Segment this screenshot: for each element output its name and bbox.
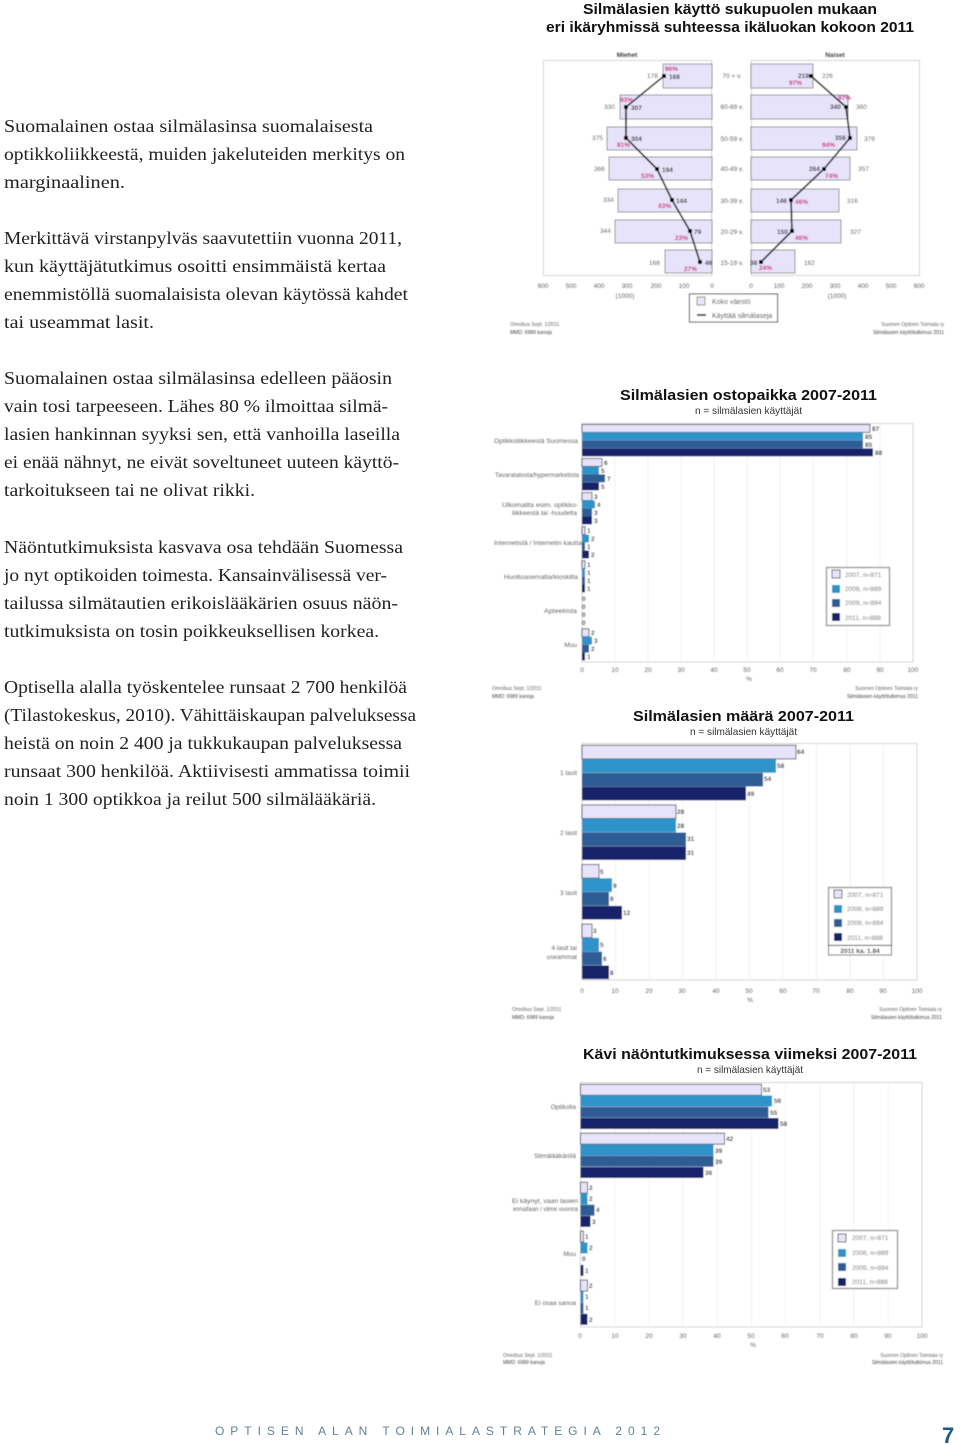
axis labels: 400: [594, 283, 605, 290]
heading: place of purchase chart: [620, 387, 877, 417]
category labels: Tavaratalosta/hypermarketista: [495, 472, 579, 479]
bar values: 39: [715, 1159, 723, 1166]
percent labels: 97%: [789, 80, 802, 87]
x axis: 0: [578, 1333, 582, 1340]
x axis: %: [747, 997, 753, 1004]
source notes: Omnibus Sept. 1/2011: [503, 1353, 553, 1359]
heading: number of glasses chart: Silmälasien määrä 2007-2011: [633, 708, 854, 725]
value labels: 366: [594, 166, 605, 173]
bar values: 1: [587, 654, 591, 661]
axis labels: 100: [774, 283, 785, 290]
source notes: MMD: 6989 kanoja: [492, 694, 534, 700]
x axis: 90: [879, 988, 887, 995]
heading: last eye exam chart: [583, 1046, 917, 1076]
percent labels: 93%: [620, 97, 633, 104]
axis labels: 600: [914, 283, 925, 290]
legend: [828, 888, 892, 955]
source notes: Omnibus Sept. 1/2011: [512, 1007, 562, 1013]
axis labels: 300: [830, 283, 841, 290]
bar values: 8: [610, 896, 614, 903]
category labels: Internetistä / Internetin kautta: [494, 540, 582, 547]
bar values: 7: [607, 476, 611, 483]
legend: [690, 294, 778, 322]
bar values: 1: [585, 1305, 589, 1312]
bar values: 58: [780, 1121, 788, 1128]
x axis: 40: [712, 988, 720, 995]
axis labels: 200: [802, 283, 813, 290]
percent labels: 74%: [825, 173, 838, 180]
source notes: Omnibus Sept. 1/2011: [510, 322, 560, 328]
bars: [580, 1084, 778, 1325]
category labels: Ulkomailta esim. optikko-: [502, 502, 578, 509]
bars: [582, 424, 873, 660]
age labels: [720, 73, 744, 267]
x axis: 100: [912, 988, 923, 995]
value labels: 344: [600, 228, 611, 235]
source notes: [512, 1007, 942, 1021]
x axis: 0: [580, 988, 584, 995]
category labels: [494, 438, 582, 649]
heading: place of purchase chart: n = silmälasien käyttäjät: [695, 405, 802, 417]
text block: body copy: runsaat 300 henkilöä. Aktiivisesti ammatissa toimii: [4, 761, 410, 781]
legend: 2011 ka. 1.84: [840, 948, 880, 955]
age labels: 30-39 v.: [720, 198, 744, 205]
bar values: 5: [600, 942, 604, 949]
bar values: 5: [601, 484, 605, 491]
x axis: 50: [747, 1333, 755, 1340]
category labels: 3 lasit: [560, 890, 577, 897]
bar values: 2: [589, 1185, 593, 1192]
percent labels: 23%: [675, 235, 688, 242]
bar values: 3: [594, 494, 598, 501]
bar values: 3: [594, 510, 598, 517]
value labels: 327: [850, 229, 861, 236]
legend: 2009, n=894: [847, 920, 884, 927]
legend: Käyttää silmälaseja: [712, 313, 772, 320]
percent labels: 46%: [795, 235, 808, 242]
line: women wearing glasses: [759, 74, 852, 264]
axis labels: (1000): [616, 293, 634, 300]
bar values: 56: [774, 1098, 782, 1105]
value labels: 375: [592, 135, 603, 142]
age labels: 50-59 v.: [720, 136, 744, 143]
category labels: Ei käynyt, vaan lasien: [512, 1198, 578, 1205]
bar values: 31: [687, 836, 695, 843]
bars: men: [607, 64, 712, 273]
value labels: 316: [847, 198, 858, 205]
bar values: 85: [865, 434, 873, 441]
percent labels: 96%: [665, 66, 678, 73]
text block: body copy: Optisella alalla työskentelee runsaat 2 700 henkilöä: [4, 677, 407, 697]
category labels: Apteekista: [544, 608, 577, 615]
bar values: 0: [582, 604, 586, 611]
line: men wearing glasses: [624, 74, 702, 264]
legend: 2007, n=871: [852, 1235, 889, 1242]
text block: body copy: Merkittävä virstanpylväs saavutettiin vuonna 2011,: [4, 228, 402, 248]
bar values: 2: [589, 1245, 593, 1252]
axis labels: 500: [886, 283, 897, 290]
chart: population pyramid of glasses use: [510, 52, 944, 336]
value labels: 334: [603, 197, 614, 204]
value labels: 357: [858, 166, 869, 173]
x axis: 30: [678, 988, 686, 995]
value labels: 146: [776, 198, 787, 205]
value labels: 46: [705, 260, 713, 267]
category labels: Optikolla: [551, 1104, 576, 1111]
axis labels: 400: [858, 283, 869, 290]
source notes: Suomen Optinen Toimiala ry: [879, 1007, 942, 1013]
axis labels: 500: [566, 283, 577, 290]
text block: body copy: tai useammat lasit.: [4, 312, 154, 332]
x axis: 60: [779, 988, 787, 995]
x axis: 70: [816, 1333, 824, 1340]
category labels: Optikkoliikkeestä Suomessa: [494, 438, 578, 445]
x axis: 10: [611, 988, 619, 995]
bar values: 2: [591, 630, 595, 637]
age labels: 40-49 v.: [720, 166, 744, 173]
value labels: [592, 73, 875, 267]
x axis: %: [750, 1342, 756, 1349]
category labels: Silmälääkärillä: [534, 1153, 576, 1160]
value labels: 304: [631, 136, 642, 143]
category labels: ennallaan / viime vuonna: [513, 1206, 578, 1213]
x axis: 80: [846, 988, 854, 995]
bar values: 3: [592, 1219, 596, 1226]
bar values: 2: [591, 536, 595, 543]
text block: body copy: tailussa silmätautien erikoislääkärien osuus näön-: [4, 593, 398, 613]
heading: age group chart: eri ikäryhmissä suhteessa ikäluokan kokoon 2011: [546, 19, 914, 36]
bar values: 4: [597, 502, 601, 509]
value labels: 356: [835, 135, 846, 142]
chart: population pyramid of glasses use: Miehet: [617, 52, 638, 59]
axis labels: (1000): [828, 293, 846, 300]
value labels: 360: [856, 104, 867, 111]
x axis: 40: [710, 667, 718, 674]
value labels: 38: [750, 260, 758, 267]
percent labels: 53%: [641, 173, 654, 180]
axis labels: 200: [651, 283, 662, 290]
bar values: 3: [594, 638, 598, 645]
text block: body copy: kun käyttäjätutkimus osoitti ensimmäistä kertaa: [4, 256, 386, 276]
source notes: Suomen Optinen Toimiala ry: [855, 686, 918, 692]
text block: body copy: ei enää nähnyt, ne eivät soveltuneet uuteen käyttö-: [4, 452, 399, 472]
source notes: Silmälasien käyttötutkimus 2011: [873, 330, 944, 336]
category labels: useammat: [547, 954, 577, 961]
value labels: 219: [798, 73, 809, 80]
category labels: 4 lasit tai: [551, 945, 577, 952]
x axis: 60: [781, 1333, 789, 1340]
bar values: 58: [777, 763, 785, 770]
bar values: 0: [582, 620, 586, 627]
bar values: 1: [587, 578, 591, 585]
bar values: 3: [594, 518, 598, 525]
source notes: MMD: 6989 kanoja: [510, 330, 552, 336]
value labels: 264: [809, 166, 820, 173]
category labels: [547, 770, 577, 961]
x axis: 10: [611, 1333, 619, 1340]
legend: [832, 1230, 898, 1288]
text block: body copy: Suomalainen ostaa silmälasinsa suomalaisesta: [4, 116, 373, 136]
bar values: 1: [585, 1234, 589, 1241]
x axis: 30: [677, 667, 685, 674]
percent labels: 97%: [838, 95, 851, 102]
value labels: 144: [676, 198, 687, 205]
heading: last eye exam chart: n = silmälasien käyttäjät: [697, 1064, 803, 1076]
percent labels: 43%: [658, 203, 671, 210]
axis labels: [538, 283, 925, 300]
source notes: Silmälasien käyttötutkimus 2011: [847, 694, 918, 700]
bar values: 1: [587, 570, 591, 577]
heading: number of glasses chart: n = silmälasien käyttäjät: [690, 726, 797, 738]
source notes: Suomen Optinen Toimiala ry: [880, 1353, 943, 1359]
axis labels: 0: [710, 283, 714, 290]
bar values: 2: [591, 552, 595, 559]
x axis: 90: [884, 1333, 892, 1340]
x axis: 80: [850, 1333, 858, 1340]
category labels: Ei osaa sanoa: [535, 1300, 576, 1307]
legend: 2009, n=894: [852, 1265, 889, 1272]
bar values: 0: [582, 596, 586, 603]
legend: 2009, n=894: [845, 600, 882, 607]
x axis: 20: [645, 1333, 653, 1340]
bar values: 1: [585, 1268, 589, 1275]
bar values: 53: [763, 1087, 771, 1094]
legend: 2007, n=871: [845, 572, 882, 579]
bar values: 88: [875, 450, 883, 457]
heading: place of purchase chart: Silmälasien ostopaikka 2007-2011: [620, 387, 877, 404]
x axis: 90: [876, 667, 884, 674]
chart: place of purchase: [492, 424, 919, 700]
text block: body copy: vain tosi tarpeeseen. Lähes 80 % ilmoittaa silmä-: [4, 396, 388, 416]
value labels: 168: [649, 260, 660, 267]
value labels: 340: [830, 104, 841, 111]
bar values: 0: [582, 1256, 586, 1263]
bar values: 9: [613, 883, 617, 890]
age labels: 20-29 v.: [720, 229, 744, 236]
text block: body copy: optikkoliikkeestä, muiden jakeluteiden merkitys on: [4, 144, 405, 164]
source notes: MMD: 6989 kanoja: [512, 1015, 554, 1021]
x axis: 20: [645, 988, 653, 995]
x axis: 20: [644, 667, 652, 674]
age labels: 70 + v.: [722, 73, 742, 80]
x axis: [580, 667, 919, 683]
legend: 2011, n=888: [852, 1279, 888, 1286]
legend: 2007, n=871: [847, 892, 884, 899]
bar values: 54: [764, 776, 772, 783]
x axis: 0: [580, 667, 584, 674]
category labels: liikkeestä tai -huudelta: [512, 510, 577, 517]
text block: body copy: enemmistöllä suomalaisista olevan käytössä kahdet: [4, 284, 408, 304]
axis labels: 300: [622, 283, 633, 290]
source notes: Omnibus Sept. 1/2011: [492, 686, 542, 692]
chart: population pyramid of glasses use: Naiset: [825, 52, 846, 59]
bar values: 6: [604, 460, 608, 467]
x axis: 100: [908, 667, 919, 674]
value labels: 379: [864, 136, 875, 143]
bar values: 2: [589, 1283, 593, 1290]
text block: body copy: Suomalainen ostaa silmälasinsa edelleen pääosin: [4, 368, 392, 388]
legend: [826, 568, 890, 626]
legend: 2008, n=889: [845, 586, 882, 593]
source notes: Silmälasien käyttötutkimus 2011: [871, 1015, 942, 1021]
bar values: [582, 426, 883, 661]
heading: number of glasses chart: [633, 708, 854, 738]
heading: last eye exam chart: Kävi näöntutkimuksessa viimeksi 2007-2011: [583, 1046, 917, 1063]
legend: Koko väestö: [712, 299, 751, 306]
bar values: 31: [687, 850, 695, 857]
source notes: Suomen Optinen Toimiala ry: [881, 322, 944, 328]
bar values: 85: [865, 442, 873, 449]
heading: age group chart: Silmälasien käyttö sukupuolen mukaan: [583, 1, 877, 18]
value labels: 150: [777, 229, 788, 236]
text block: body copy: lasien hankinnan syyksi sen, että vanhoilla laseilla: [4, 424, 400, 444]
text block: body copy: noin 1 300 optikkoa ja reilut 500 silmälääkäriä.: [4, 789, 376, 809]
axis labels: 600: [538, 283, 549, 290]
age labels: 60-69 v.: [720, 104, 744, 111]
x axis: 80: [843, 667, 851, 674]
percent labels: 81%: [617, 142, 630, 149]
bar values: [593, 749, 805, 977]
value labels: 162: [804, 260, 815, 267]
bar values: 1: [585, 1294, 589, 1301]
bar values: 1: [587, 528, 591, 535]
bar values: [582, 1087, 788, 1324]
bar values: 6: [603, 956, 607, 963]
text block: body copy: tutkimuksista on tosin poikkeuksellisen korkea.: [4, 621, 379, 641]
category labels: 1 lasit: [560, 770, 577, 777]
bar values: 12: [623, 910, 631, 917]
legend: 2008, n=889: [847, 906, 884, 913]
bar values: 3: [593, 928, 597, 935]
legend: 2011, n=888: [845, 615, 881, 622]
bar values: 39: [715, 1148, 723, 1155]
bar values: 55: [770, 1110, 778, 1117]
source notes: [492, 686, 918, 700]
category labels: Muu: [563, 1251, 576, 1258]
value labels: 330: [604, 104, 615, 111]
footer: publication title: OPTISEN ALAN TOIMIALASTRATEGIA 2012: [215, 1424, 660, 1438]
text block: body copy: (Tilastokeskus, 2010). Vähittäiskaupan palveluksessa: [4, 705, 416, 725]
x axis: 50: [743, 667, 751, 674]
value labels: 307: [631, 105, 642, 112]
percent labels: 24%: [759, 265, 772, 272]
x axis: 60: [776, 667, 784, 674]
text block: body copy: heistä on noin 2 400 ja tukkukaupan palveluksessa: [4, 733, 402, 753]
axis labels: 0: [749, 283, 753, 290]
source notes: MMD: 6989 kanoja: [503, 1360, 545, 1366]
age labels: 15-19 v.: [720, 260, 744, 267]
bars: women: [751, 64, 857, 273]
bar values: 28: [677, 809, 685, 816]
bar values: 28: [677, 823, 685, 830]
bar values: 42: [726, 1136, 734, 1143]
bar values: 1: [587, 586, 591, 593]
percent labels: [617, 66, 851, 273]
text block: body copy: Näöntutkimuksista kasvava osa tehdään Suomessa: [4, 537, 403, 557]
x axis: 40: [713, 1333, 721, 1340]
x axis: 30: [679, 1333, 687, 1340]
text block: body copy: jo nyt optikoiden toimesta. Kansainvälisessä ver-: [3, 565, 387, 585]
value labels: 226: [822, 73, 833, 80]
source notes: [503, 1353, 943, 1366]
bar values: 1: [587, 544, 591, 551]
percent labels: 27%: [684, 266, 697, 273]
bar values: 87: [872, 426, 880, 433]
x axis: [578, 1333, 928, 1349]
bar values: 5: [601, 468, 605, 475]
bar values: 2: [591, 646, 595, 653]
bar values: 64: [797, 749, 805, 756]
source notes: Silmälasien käyttötutkimus 2011: [872, 1360, 943, 1366]
percent labels: 94%: [822, 142, 835, 149]
category labels: 2 lasit: [560, 830, 577, 837]
text block: body copy: marginaalinen.: [4, 172, 125, 192]
text block: body copy: tarkoitukseen tai ne olivat rikki.: [4, 480, 255, 500]
value labels: 194: [662, 167, 673, 174]
category labels: Muu: [564, 642, 577, 649]
legend: 2008, n=889: [852, 1250, 889, 1257]
category labels: [512, 1104, 578, 1307]
axis labels: 100: [679, 283, 690, 290]
category labels: Huoltoasemalta/kioskilta: [504, 574, 578, 581]
chart: last eye exam: [503, 1082, 943, 1366]
x axis: 100: [917, 1333, 928, 1340]
bar values: 0: [582, 612, 586, 619]
x axis: 70: [812, 988, 820, 995]
bar values: 49: [747, 791, 755, 798]
bar values: 2: [589, 1196, 593, 1203]
chart: number of glasses: [512, 744, 942, 1021]
value labels: 168: [669, 74, 680, 81]
x axis: 50: [745, 988, 753, 995]
heading: age group chart: [546, 1, 914, 36]
text block: body copy: [3, 116, 416, 809]
source notes: [510, 322, 944, 336]
x axis: 70: [809, 667, 817, 674]
bar values: 8: [610, 970, 614, 977]
legend: 2011, n=888: [847, 935, 883, 942]
bar values: 5: [600, 869, 604, 876]
value labels: 178: [647, 73, 658, 80]
x axis: %: [746, 676, 752, 683]
bar values: 2: [589, 1317, 593, 1324]
bars: [582, 745, 796, 979]
bar values: 36: [705, 1170, 713, 1177]
x axis: [580, 988, 923, 1004]
bar values: 1: [587, 562, 591, 569]
value labels: 79: [694, 229, 702, 236]
x axis: 10: [611, 667, 619, 674]
percent labels: 46%: [795, 199, 808, 206]
bar values: 4: [596, 1207, 600, 1214]
